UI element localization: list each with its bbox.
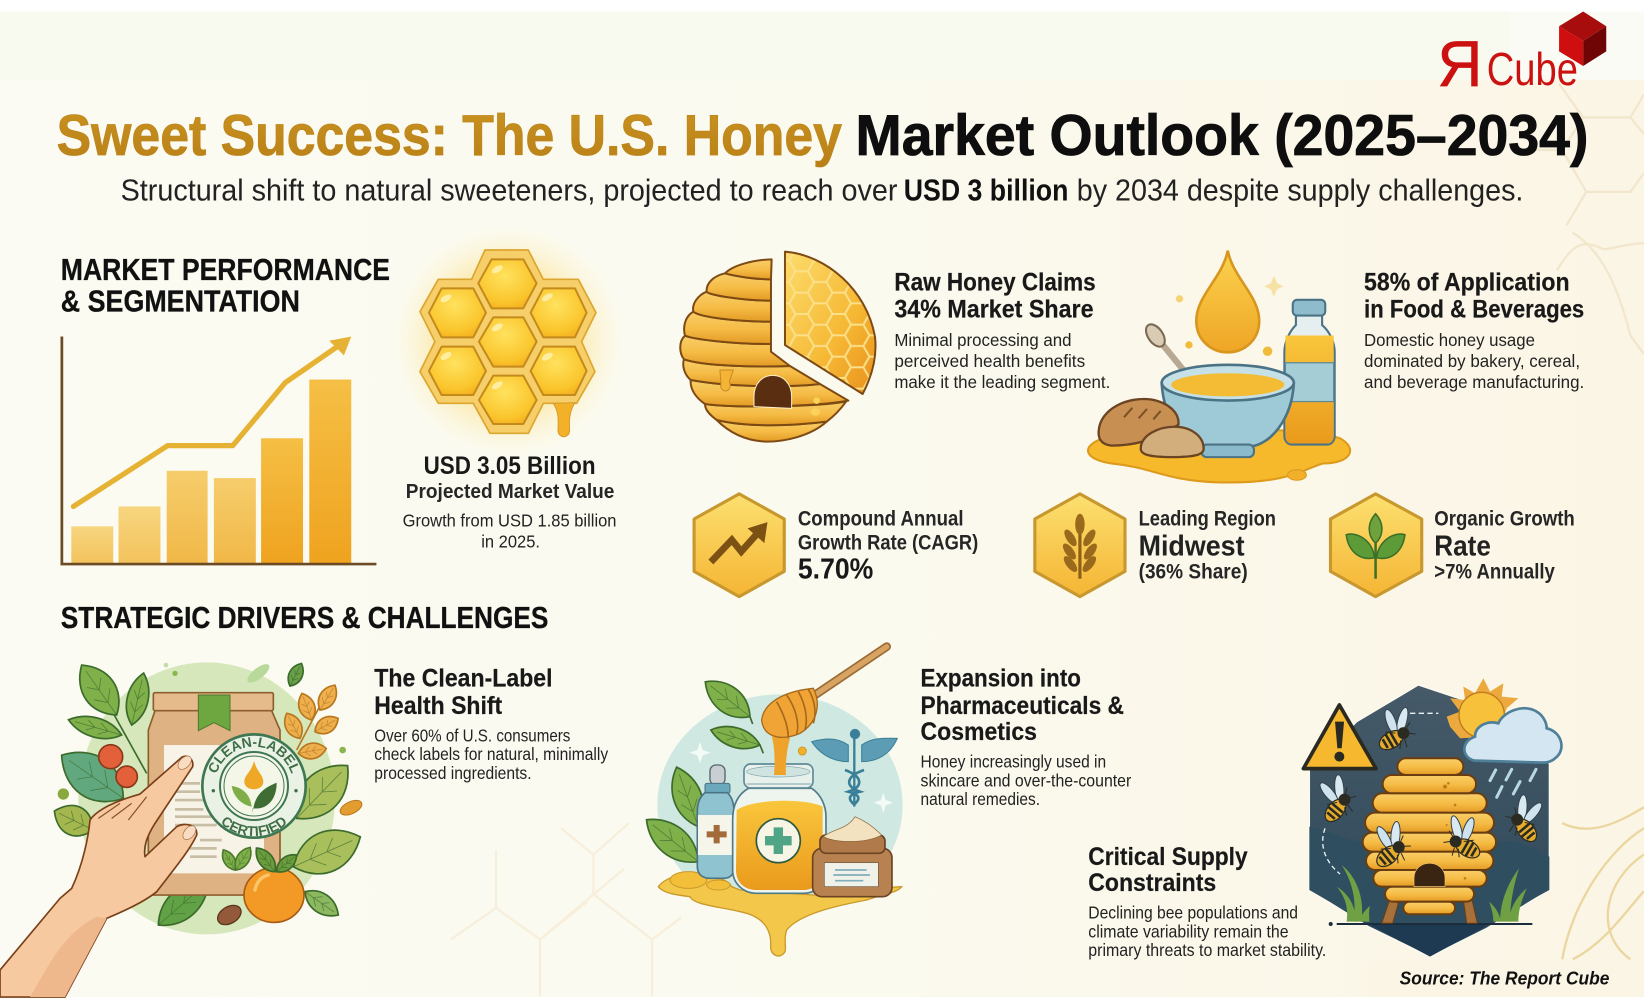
text: clean-label: Health Shift: [374, 693, 502, 720]
stat: CAGR: Growth Rate (CAGR): [798, 531, 978, 554]
clean-label seal: CERTIFIED: [222, 817, 286, 836]
text: supply constraints: [1088, 844, 1326, 960]
icon: food and beverages: [1088, 251, 1350, 482]
bar chart: rising market: [62, 337, 376, 564]
text: food and beverages: dominated by bakery, cereal,: [1364, 351, 1580, 371]
icon: wheat hexagon: [1035, 494, 1125, 597]
subtitle: by 2034 despite supply challenges.: [1077, 173, 1523, 207]
bottle: [1284, 300, 1335, 445]
clean-label seal: CLEAN-LABEL: [209, 737, 298, 774]
subtitle: USD 3 billion: [904, 173, 1068, 207]
honey jar: [733, 764, 826, 893]
source credit: Source: The Report Cube: [1400, 967, 1609, 988]
stat: leading region: Midwest: [1139, 530, 1245, 562]
orange fruit: [214, 844, 304, 929]
title: [57, 104, 1588, 168]
text: food and beverages: [1364, 269, 1584, 392]
kraft bag: [148, 693, 280, 895]
text: food and beverages: Domestic honey usage: [1364, 330, 1535, 350]
text: market value: [403, 453, 617, 551]
hive door: [754, 375, 792, 408]
hand: [0, 754, 198, 997]
icon: growth hexagon: [694, 494, 784, 597]
stat: CAGR: Compound Annual: [798, 507, 964, 530]
cream jar: [813, 817, 892, 897]
clean-label seal: [201, 733, 307, 839]
stat: organic growth: Rate: [1434, 530, 1491, 562]
text: pharmaceuticals: [921, 666, 1131, 809]
text: clean-label: The Clean-Label: [374, 666, 553, 693]
text: raw honey: Minimal processing and: [894, 330, 1072, 350]
text: clean-label: check labels for natural, minimally: [374, 744, 608, 764]
bees: [1305, 698, 1557, 875]
text: supply constraints: Constraints: [1088, 870, 1216, 897]
text: supply constraints: primary threats to market stability.: [1088, 940, 1326, 960]
text: food and beverages: and beverage manufacturing.: [1364, 372, 1584, 392]
dropper bottle: [697, 765, 734, 878]
title: Sweet Success: The U.S. Honey: [57, 104, 842, 168]
text: pharmaceuticals: skincare and over-the-counter: [921, 770, 1131, 790]
logo: RCube: Cube: [1487, 43, 1578, 95]
stat: organic growth: >7% Annually: [1434, 561, 1555, 584]
heading: market performance and segmentation: & SEGMENTATION: [61, 284, 300, 318]
text: supply constraints: Declining bee populations and: [1088, 902, 1298, 922]
text: market value: in 2025.: [481, 531, 540, 551]
icon: clean-label illustration: [0, 662, 362, 998]
title: Market Outlook (2025–2034): [856, 104, 1588, 168]
text: supply constraints: Critical Supply: [1088, 844, 1248, 871]
stat: leading region: [1035, 494, 1276, 597]
cloud: [1464, 708, 1561, 763]
text: pharmaceuticals: Expansion into: [921, 666, 1081, 693]
bread: [1099, 399, 1204, 457]
hive: [1363, 758, 1496, 923]
bowl: [1162, 365, 1294, 457]
text: raw honey: 34% Market Share: [894, 297, 1094, 324]
text: raw honey: perceived health benefits: [894, 351, 1085, 371]
text: clean-label: processed ingredients.: [374, 763, 532, 783]
caduceus: [812, 729, 897, 807]
source credit: [1368, 960, 1644, 997]
subtitle: [121, 173, 1523, 207]
leaves: [637, 671, 763, 873]
heading: strategic drivers and challenges: STRATEGIC DRIVERS & CHALLENGES: [61, 601, 548, 635]
text: market value: Growth from USD 1.85 billion: [403, 510, 617, 530]
heading: market performance and segmentation: MARKET PERFORMANCE: [61, 253, 390, 287]
text: raw honey: [894, 269, 1110, 392]
text: clean-label: [374, 666, 608, 783]
text: supply constraints: climate variability remain the: [1088, 921, 1289, 941]
icon: beehive with pie slice: [680, 252, 875, 442]
icon: beehive threats illustration: [1303, 678, 1561, 957]
text: pharmaceuticals: Pharmaceuticals &: [921, 693, 1124, 720]
icon: sprout hexagon: [1331, 494, 1422, 597]
text: food and beverages: in Food & Beverages: [1364, 297, 1584, 324]
icon: pharmaceuticals and cosmetics illustration: [637, 647, 903, 956]
text: raw honey: make it the leading segment.: [894, 372, 1110, 392]
stat: CAGR: [694, 494, 978, 597]
pie slice: [785, 252, 875, 394]
text: market value: Projected Market Value: [406, 480, 614, 503]
stat: organic growth: [1331, 494, 1575, 597]
logo: RCube: Я: [1437, 27, 1483, 100]
text: food and beverages: 58% of Application: [1364, 269, 1570, 296]
stat: organic growth: Organic Growth: [1434, 507, 1575, 530]
grass: [1337, 865, 1527, 922]
spoon: [1142, 321, 1196, 386]
leaves: [48, 656, 369, 936]
text: raw honey: Raw Honey Claims: [894, 269, 1096, 296]
stat: leading region: (36% Share): [1139, 561, 1248, 584]
text: market value: USD 3.05 Billion: [424, 453, 596, 480]
text: clean-label: Over 60% of U.S. consumers: [374, 725, 570, 745]
text: pharmaceuticals: Cosmetics: [921, 719, 1037, 746]
honey drop: [1196, 251, 1259, 352]
honey puddle: [1088, 429, 1350, 482]
stat: leading region: Leading Region: [1139, 507, 1276, 530]
heading: market performance and segmentation: [61, 253, 390, 318]
warning triangle: [1303, 705, 1376, 769]
text: pharmaceuticals: natural remedies.: [921, 789, 1040, 809]
dipper: [762, 647, 887, 775]
icon: honeycomb: [390, 223, 625, 458]
subtitle: Structural shift to natural sweeteners, projected to reach over: [121, 173, 897, 207]
stat: CAGR: 5.70%: [798, 553, 873, 585]
sun: [1447, 678, 1518, 738]
rain: [1490, 769, 1536, 797]
honey puddle: [658, 874, 902, 956]
text: pharmaceuticals: Honey increasingly used in: [921, 751, 1106, 771]
logo: RCube: [1437, 12, 1606, 100]
icon: red cube: [1559, 12, 1606, 66]
